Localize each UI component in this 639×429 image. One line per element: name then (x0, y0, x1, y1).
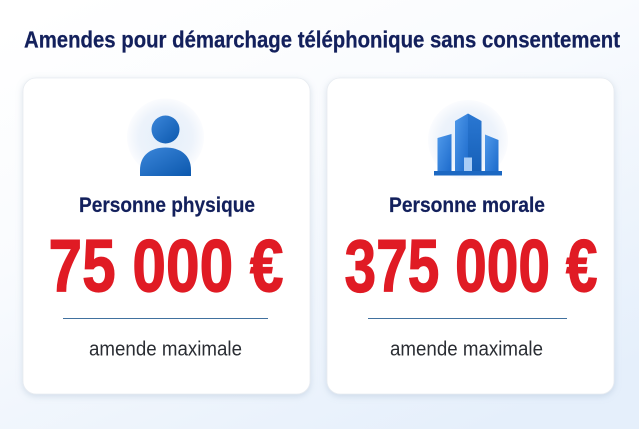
panel: personne physique (23, 78, 310, 394)
icon: building (428, 100, 508, 180)
heading: personne physique: Personne physique (79, 193, 255, 217)
caption: amende maximale: amende maximale (390, 338, 543, 360)
caption: amende maximale: amende maximale (89, 338, 242, 360)
icon: person (127, 98, 204, 176)
heading: personne morale: Personne morale (389, 193, 545, 217)
panel: personne morale (327, 78, 614, 394)
amount: 75 000 €: 75 000 € (48, 224, 284, 308)
